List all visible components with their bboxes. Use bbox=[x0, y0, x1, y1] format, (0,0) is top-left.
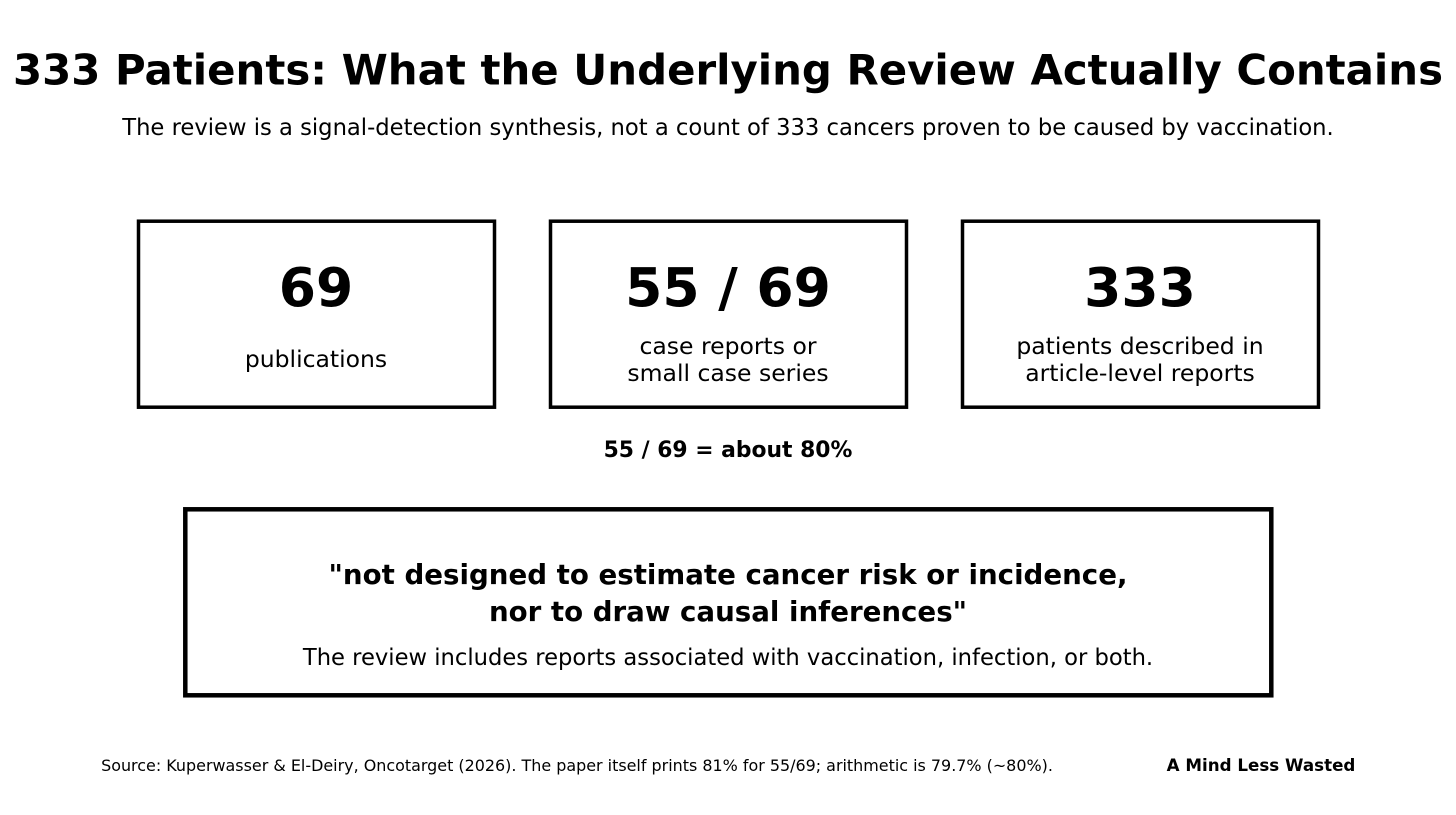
label: patients: article-level reports bbox=[1025, 359, 1255, 387]
quote note: The review includes reports associated with vaccination, infection, or both. bbox=[302, 645, 1153, 671]
calculation note: 55 / 69 = about 80% bbox=[604, 438, 852, 463]
stat: 55 / 69: 55 / 69 bbox=[625, 256, 831, 319]
quote: nor to draw causal inferences" bbox=[489, 595, 967, 628]
subtitle: The review is a signal-detection synthesis, not a count of 333 cancers proven to be caused by vaccination. bbox=[121, 115, 1334, 141]
title: 333 Patients: What the Underlying Review Actually Contains bbox=[13, 46, 1443, 95]
label: case reports: case reports or bbox=[639, 332, 817, 360]
source line: Source: Kuperwasser & El-Deiry, Oncotarget (2026). The paper itself prints 81% for 55/69; arithmetic is 79.7% (~80%). bbox=[101, 756, 1053, 775]
stat: 333: 333 bbox=[1084, 256, 1196, 319]
stat: 69: 69 bbox=[279, 256, 353, 319]
panel: publications bbox=[138, 221, 494, 407]
quote bbox=[329, 558, 1127, 628]
label: case reports: small case series bbox=[627, 359, 829, 387]
label: publications: publications bbox=[245, 345, 387, 373]
panel: patients bbox=[962, 221, 1318, 407]
panel: quote callout bbox=[185, 509, 1271, 695]
label: patients bbox=[1016, 332, 1264, 387]
brand: A Mind Less Wasted bbox=[1167, 755, 1355, 775]
label: patients: patients described in bbox=[1016, 332, 1264, 360]
panel: case reports bbox=[550, 221, 906, 407]
label: case reports bbox=[627, 332, 829, 387]
quote: "not designed to estimate cancer risk or incidence, bbox=[329, 558, 1127, 591]
